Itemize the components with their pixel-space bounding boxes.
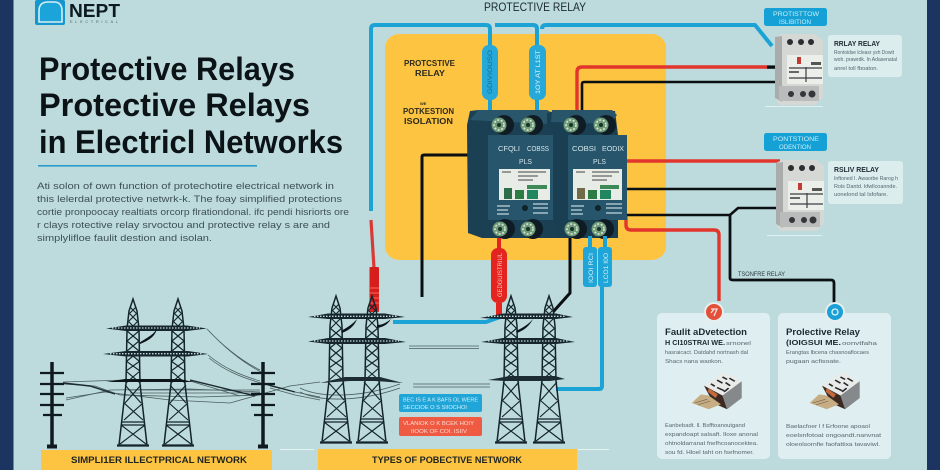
network wires — [63, 329, 490, 403]
utility pole right — [251, 362, 275, 447]
wires: blue top lines — [371, 25, 772, 211]
card: relay lower: uonelond tal Isfofare. — [834, 192, 888, 198]
white baseline strokes — [280, 448, 609, 450]
card body text: ohtnoldarranat fnefhcoanocektea. — [665, 441, 758, 447]
card body text: Eanbebadt. ll. Bsfftoanoutgand — [665, 423, 745, 429]
icon: relay component — [692, 372, 742, 409]
tower pair 1 — [103, 299, 208, 446]
label: relay: RELAY — [415, 68, 445, 78]
fuses: top blue: 1OY AT L1ST — [535, 50, 542, 94]
device: breaker top — [775, 34, 823, 105]
screws — [564, 115, 586, 135]
label: protection tag lower — [764, 133, 827, 151]
card body text — [786, 424, 882, 448]
panel: yellow relay area — [385, 34, 666, 260]
card body text: oloeolsornfie faofattixa tavaviwl. — [786, 442, 881, 448]
device: breaker lower — [776, 160, 824, 231]
relay screen — [499, 169, 550, 200]
title: in Electricl Networks — [39, 124, 343, 160]
heading: protective relay: PROTECTIVE RELAY — [484, 2, 586, 14]
card heading: Prolective Relay — [786, 327, 861, 338]
network heavy wire — [63, 380, 295, 396]
fuses: top blue — [482, 45, 546, 100]
relay body — [467, 110, 556, 238]
relay model text — [498, 144, 549, 166]
label: protection relay tag: PROTISTTOW — [773, 11, 820, 18]
relay body — [547, 111, 627, 238]
relay small print — [571, 204, 622, 214]
logo — [35, 0, 121, 25]
fuse: red lower — [491, 238, 507, 316]
label: top relay: TSONFRE RELAY — [738, 272, 785, 278]
card description: Erangtas lbcena chasnoaflocaes — [786, 350, 869, 356]
card: relay lower — [828, 161, 903, 204]
relay front panel — [488, 135, 553, 220]
fuses: lower blue: LCO1 I0O — [603, 253, 610, 283]
label: protection relay tag — [764, 8, 827, 26]
card: relay lower: Inftoned I. Awaorbe Rarog h — [834, 176, 898, 182]
relay model text — [572, 144, 624, 166]
note: red: VLANIOK O K BCEK HOIY — [403, 421, 474, 427]
label: protection tag lower: PONTSTIONE — [773, 136, 819, 143]
relay small print — [497, 204, 548, 214]
relay model text: PLS — [593, 157, 606, 166]
card: relay top: Rontoidse lcleasr ysh Dowit — [834, 50, 894, 56]
card description: hasraicact. Datdahd nortnash dal — [665, 350, 748, 356]
card: relay top: woh. prawrdk. ln Adasenatal — [833, 57, 897, 63]
breaker shadow top — [765, 106, 823, 107]
intro text block: Ati solon of own function of protechotire electrical network in — [37, 180, 334, 191]
label: protective relay: PROTCSTIVE — [404, 58, 455, 68]
relay button — [595, 205, 601, 211]
relay: right unit — [547, 110, 627, 239]
relay model text: CFQLI — [498, 144, 520, 153]
label: protection isolation — [403, 101, 454, 126]
relay model text: COBSS — [527, 144, 549, 153]
card description: pugaan acfisoate. — [786, 359, 842, 365]
card: relay lower: Rols Dantd. kfwllcoannde. — [834, 184, 897, 190]
intro text block: simplylifloe faulit destion and isolan. — [37, 232, 212, 243]
label: protection relay tag: ISLIBITION — [779, 19, 811, 26]
fuse: red left — [370, 267, 379, 312]
card description: Shacs nana waokon. — [665, 359, 724, 365]
wire end stub — [767, 65, 776, 69]
note: blue: SECCIOE O S SIIOCHOI — [403, 405, 467, 411]
note: blue — [399, 394, 482, 412]
card description: oonvtfaha — [842, 341, 878, 347]
label: protection isolation: POTKESTION — [403, 106, 454, 116]
card: fault detection — [657, 313, 770, 459]
card subheading: (IOIGSUI ME. — [786, 338, 841, 347]
wire: blue tower link — [393, 316, 503, 322]
relay: left unit — [467, 110, 556, 239]
relay model text: COBSI — [572, 144, 596, 153]
card: relay top: anrel toll fboaton. — [834, 66, 878, 72]
wire: blue lower return — [556, 287, 602, 389]
footer banner: simplified electrical network: SIMPLI1ER ILLECTPRICAL NETWORK — [71, 455, 247, 466]
card description — [665, 341, 751, 365]
right navy side bar — [927, 0, 940, 470]
icon: relay component — [810, 372, 860, 409]
card: relay lower: RSLIV RELAY — [834, 167, 879, 174]
screws — [492, 115, 514, 135]
label: protection tag lower: ODENTION — [779, 144, 811, 151]
fuses: lower blue — [583, 236, 612, 287]
wires: black — [422, 82, 834, 312]
title — [39, 51, 343, 160]
relay model text: EODIX — [602, 144, 624, 153]
title: Protective Relays — [39, 51, 295, 87]
tower pair 3 — [480, 296, 575, 442]
icon: blue marker — [825, 302, 845, 322]
relay front panel — [568, 135, 627, 220]
footer banner: types of network — [318, 449, 577, 470]
relay screen — [573, 169, 622, 200]
card: protective relay — [778, 313, 891, 459]
note: red — [399, 417, 482, 436]
footer banner: simplified electrical network — [41, 450, 272, 470]
wires: red — [577, 67, 780, 301]
card body text: expandoapt salsaft. Iloxe anonal — [665, 432, 758, 438]
title underline — [38, 165, 257, 167]
card: relay top — [828, 35, 902, 77]
intro text block: r clays rotective relay srvoctou and protective relay s are and — [37, 219, 330, 230]
breaker shadow lower — [767, 235, 822, 236]
logo wordmark: NEPT — [69, 0, 121, 21]
title: Protective Relays — [39, 87, 310, 123]
card heading: Faulit aDvetection — [665, 327, 747, 338]
fuses: lower blue: IOOI RCI — [588, 253, 595, 283]
relay model text: PLS — [519, 157, 532, 166]
card description: srnonel — [726, 341, 751, 347]
utility pole left — [40, 362, 64, 447]
card body text: sou fd. Hloel taht on fsefnomer. — [665, 450, 754, 456]
fuses: top blue: GDIVIOUSO — [487, 50, 494, 94]
label: protection isolation: ISOLATION — [404, 116, 453, 126]
tower pair 2 — [308, 296, 406, 442]
left navy side bar — [0, 0, 14, 470]
card: relay top: RRLAY RELAY — [834, 41, 880, 48]
intro text block: this lelerdal protective netwrk-k. The foay simplified protections — [37, 193, 342, 204]
fuse: red lower: GEDGUISTRIUL — [497, 253, 504, 297]
wire: red left — [371, 220, 374, 268]
icon: red marker — [704, 302, 724, 322]
label: protection isolation: WE — [420, 101, 427, 106]
logo tagline: ELECTRICAL — [70, 19, 119, 24]
footer banner: types of network: TYPES OF POBECTIVE NETWORK — [372, 455, 522, 466]
card description — [786, 341, 878, 365]
card body text: Baelacfoer l f Erfoone apoaol — [786, 424, 870, 430]
note: blue: BEC IS E A K BAFS OL WERE — [403, 398, 478, 404]
note: red: IIOOK OF COI. ISIIV — [411, 429, 467, 435]
relay button — [522, 205, 528, 211]
intro text block: cortie pronpoocay realtiats orcorp flrationdonal. ifc pendi hisriorts ore — [37, 206, 349, 217]
icon: logo badge — [35, 0, 65, 25]
intro text block — [37, 180, 349, 243]
card body text: eoelsnfotoat ongoandt.nanvnat — [786, 433, 882, 439]
card subheading: H CI10STRAI WE. — [665, 338, 725, 347]
card body text — [665, 423, 758, 456]
